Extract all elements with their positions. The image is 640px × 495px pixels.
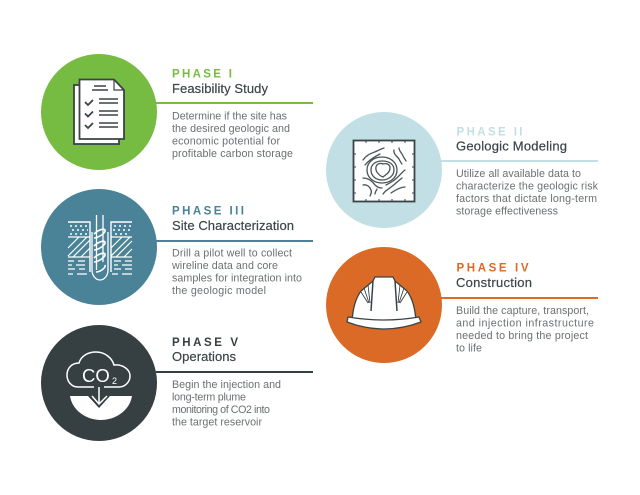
circle: Phase III xyxy=(41,189,157,305)
text: Phase I description: Determine if the site has xyxy=(172,110,287,122)
icon: CO2 cloud with arrow into reservoir xyxy=(67,352,132,420)
label: Phase III: PHASE III xyxy=(172,206,244,218)
heading: Construction: Construction xyxy=(456,275,532,290)
icon: documents with checklist xyxy=(74,80,124,144)
connector line: Phase I xyxy=(156,102,313,104)
panel: Phase I feasibility study xyxy=(41,54,313,170)
circle: Phase II xyxy=(326,112,442,228)
text: Phase V description: Begin the injection and xyxy=(172,379,281,391)
text: Phase III description: samples for integration into xyxy=(172,272,302,284)
text: Phase II description xyxy=(456,168,599,218)
text: Phase V description: long-term plume xyxy=(172,392,246,404)
heading: Feasibility Study: Feasibility Study xyxy=(172,81,268,96)
text: Phase III description: wireline data and core xyxy=(171,260,278,272)
text: Phase V description: monitoring of CO2 into xyxy=(172,404,270,416)
icon: CO2 cloud with arrow into reservoir: 2 xyxy=(112,376,117,386)
connector line: Phase IV xyxy=(441,297,598,299)
text: Phase IV description: needed to bring the project xyxy=(456,330,588,342)
connector line: Phase II xyxy=(441,160,598,162)
text: Phase V description xyxy=(172,379,281,428)
text: Phase IV description: to life xyxy=(456,342,482,354)
label: Phase V: PHASE V xyxy=(172,337,238,349)
panel: Phase III site characterization xyxy=(41,189,313,305)
heading: Geologic Modeling: Geologic Modeling xyxy=(456,138,567,154)
panel: Phase V operations xyxy=(41,325,313,441)
text: Phase II description: characterize the geologic risk xyxy=(456,180,599,192)
panel: Phase IV construction xyxy=(326,247,598,363)
text: Phase II description: factors that dictate long-term xyxy=(456,193,597,205)
text: Phase IV description: and injection infrastructure xyxy=(456,318,594,330)
text: Phase IV description: Build the capture, transport, xyxy=(456,305,589,317)
circle: Phase V xyxy=(41,325,157,441)
heading: Operations: Operations xyxy=(172,349,236,364)
circle: Phase IV xyxy=(326,247,442,363)
circle: Phase I xyxy=(41,54,157,170)
connector line: Phase III xyxy=(156,240,313,242)
panel: Phase II geologic modeling xyxy=(326,112,599,228)
text: Phase III description: the geologic model xyxy=(172,285,266,297)
icon: contour map xyxy=(354,140,414,202)
label: Phase IV: PHASE IV xyxy=(456,262,529,274)
text: Phase I description: the desired geologic and xyxy=(172,123,290,135)
text: Phase I description: economic potential for xyxy=(172,136,280,148)
connector line: Phase V xyxy=(156,371,313,373)
icon: drilled well through rock layers xyxy=(68,215,132,280)
text: Phase III description: Drill a pilot well to collect xyxy=(172,248,292,260)
text: Phase IV description xyxy=(456,305,594,354)
icon: CO2 cloud with arrow into reservoir: CO xyxy=(82,365,110,386)
text: Phase V description: the target reservoir xyxy=(172,416,262,428)
text: Phase II description: storage effectiveness xyxy=(456,206,558,218)
text: Phase I description: profitable carbon storage xyxy=(172,148,293,160)
label: Phase I: PHASE I xyxy=(172,68,232,80)
label: Phase II: PHASE II xyxy=(456,126,522,138)
icon: hard hat xyxy=(347,277,421,329)
heading: Site Characterization: Site Characterization xyxy=(172,218,294,233)
text: Phase I description xyxy=(172,110,293,160)
text: Phase II description: Utilize all available data to xyxy=(456,168,581,180)
text: Phase III description xyxy=(171,248,302,297)
